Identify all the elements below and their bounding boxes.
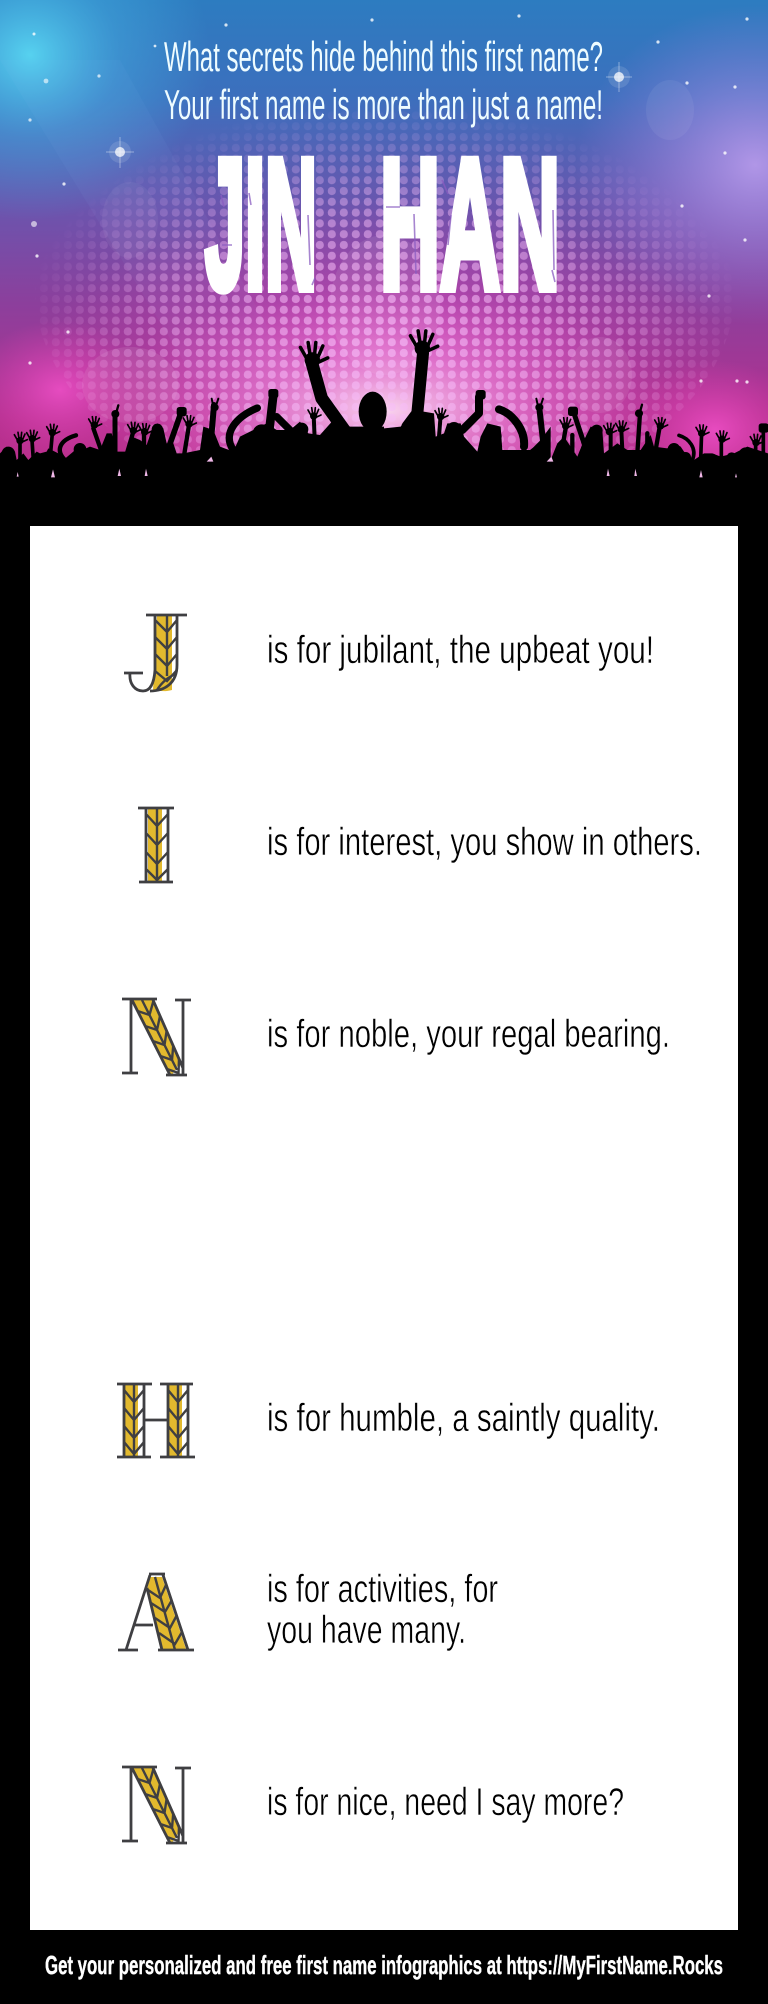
sparkles	[28, 14, 749, 384]
header: concert stage background	[0, 0, 768, 460]
row: N (nice)	[122, 1767, 624, 1843]
white content panel	[30, 526, 738, 1930]
icon: wheat letter I	[138, 808, 174, 882]
text: A lines	[267, 1568, 498, 1652]
crowd: left half	[0, 342, 387, 520]
crowd: right half	[384, 331, 768, 520]
icon: wheat letter N	[122, 999, 191, 1075]
icon: wheat letter J	[124, 615, 187, 691]
row: J	[124, 615, 654, 691]
text: N nice line: is for nice, need I say more?	[267, 1781, 624, 1824]
text: A lines: you have many.	[267, 1609, 466, 1652]
row: H	[117, 1384, 660, 1457]
row: N (noble)	[122, 999, 670, 1075]
text: J line: is for jubilant, the upbeat you!	[267, 629, 654, 672]
crowd silhouette	[0, 331, 768, 520]
title: JIN HAN: JIN	[205, 122, 317, 328]
text: A lines: is for activities, for	[267, 1568, 498, 1611]
crowd gaps	[17, 457, 737, 477]
icon: wheat letter H	[117, 1384, 195, 1457]
icon: wheat letter A	[118, 1574, 194, 1650]
row: I	[138, 808, 702, 882]
row: A	[118, 1568, 498, 1652]
icon: wheat letter N	[122, 1767, 191, 1843]
subtitle heading	[164, 33, 603, 128]
